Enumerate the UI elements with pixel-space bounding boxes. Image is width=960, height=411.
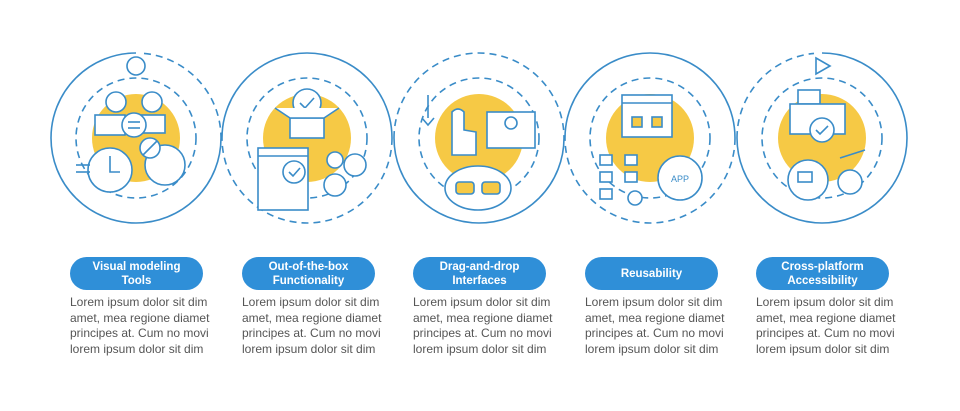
text block 5: Lorem ipsum dolor sit dim amet, mea regione diamet principes at. Cum no movi lorem ipsum dolor sit dim [756, 295, 895, 356]
pill: Out-of-the-box Functionality: Out-of-the-box [269, 260, 348, 272]
pill: Drag-and-drop Interfaces: Drag-and-drop [440, 260, 519, 272]
circle 2 [222, 53, 392, 223]
circle 4 [565, 53, 735, 223]
circle 1 [51, 53, 221, 223]
pill: Visual modeling Tools: Tools [122, 274, 151, 286]
pill: Drag-and-drop Interfaces [413, 257, 546, 290]
text block 1: Lorem ipsum dolor sit dim amet, mea regione diamet principes at. Cum no movi lorem ipsum dolor sit dim [70, 295, 209, 356]
text block 4: Lorem ipsum dolor sit dim amet, mea regione diamet principes at. Cum no movi lorem ipsum dolor sit dim [585, 295, 724, 356]
pill: Out-of-the-box Functionality: Functionality [273, 274, 344, 286]
pill: Visual modeling Tools: Visual modeling [92, 260, 180, 272]
pill: Visual modeling Tools [70, 257, 203, 290]
pill: Reusability: Reusability [621, 268, 682, 280]
pill: Drag-and-drop Interfaces: Interfaces [452, 274, 507, 286]
pill: Cross-platform Accessibility: Accessibility [787, 274, 858, 286]
circle 3 [394, 53, 564, 223]
circle 4: APP [671, 174, 689, 184]
pill: Reusability [585, 257, 718, 290]
text block 2: Lorem ipsum dolor sit dim amet, mea regione diamet principes at. Cum no movi lorem ipsum dolor sit dim [242, 295, 381, 356]
pill: Cross-platform Accessibility: Cross-platform [781, 260, 864, 272]
text block 3: Lorem ipsum dolor sit dim amet, mea regione diamet principes at. Cum no movi lorem ipsum dolor sit dim [413, 295, 552, 356]
circle 5 [737, 53, 907, 223]
pill: Out-of-the-box Functionality [242, 257, 375, 290]
pill: Cross-platform Accessibility [756, 257, 889, 290]
